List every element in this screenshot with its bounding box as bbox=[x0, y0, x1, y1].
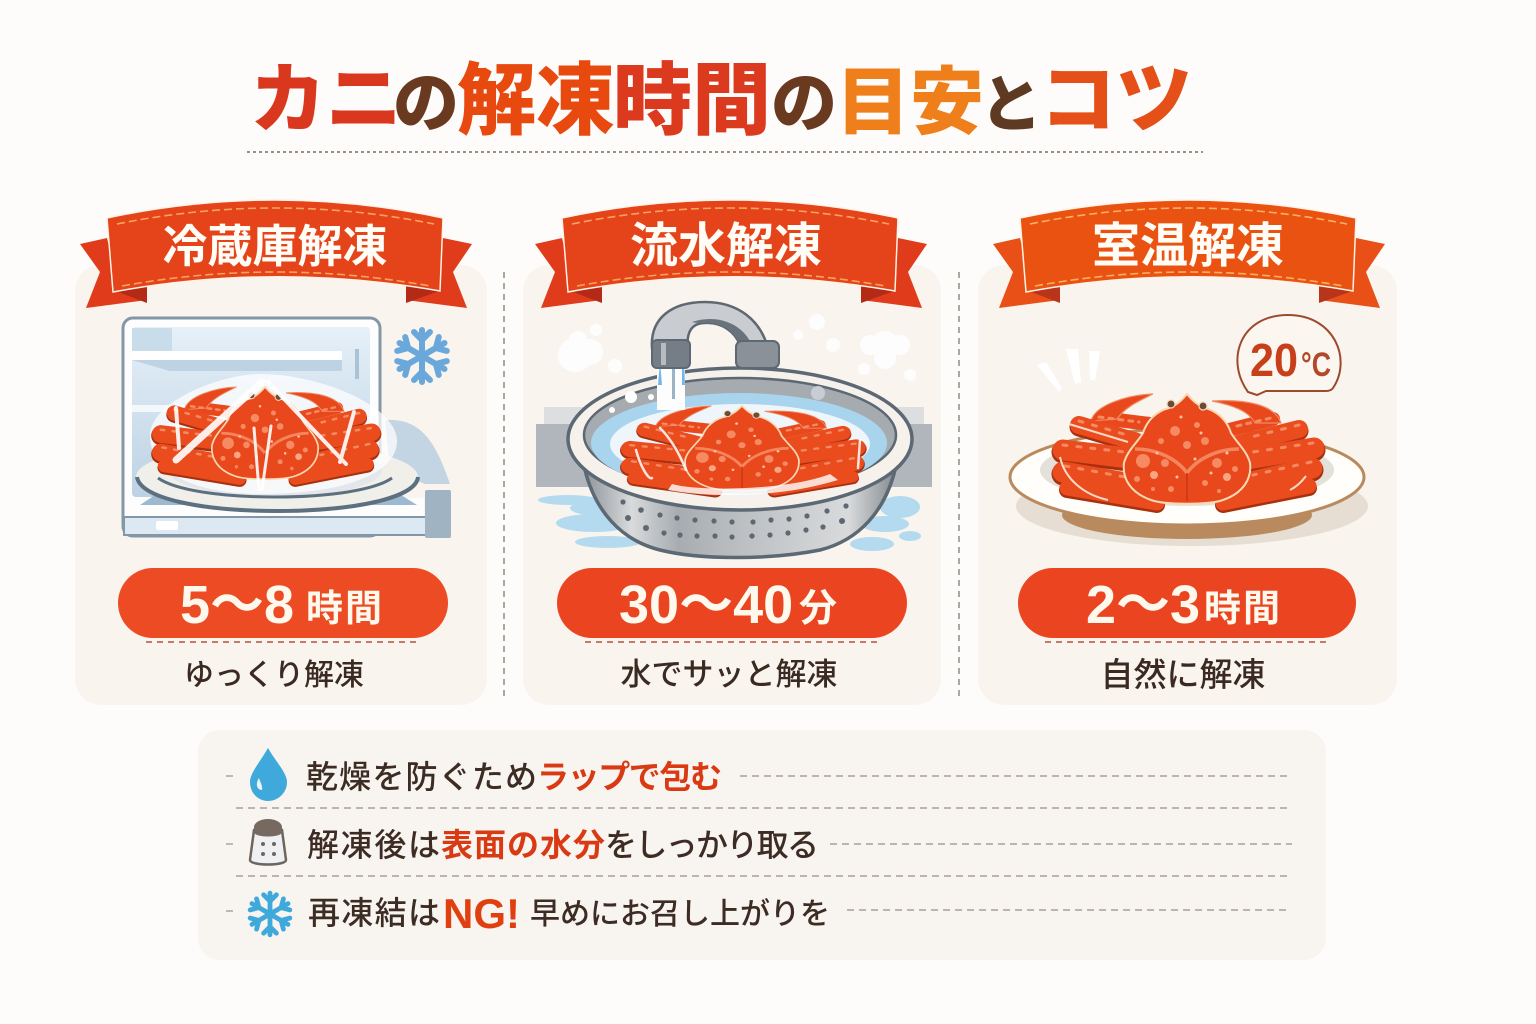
title: 時間 bbox=[613, 56, 771, 145]
tip text: 再凍結は bbox=[308, 895, 440, 931]
panel: refrigerator thawing bbox=[75, 265, 487, 705]
tip text bbox=[307, 827, 819, 863]
caption: 自然に解凍 bbox=[1100, 656, 1266, 693]
time pill: 2〜3 bbox=[1086, 575, 1200, 635]
icon: water drop bbox=[250, 748, 287, 801]
tip 2 bbox=[250, 819, 819, 864]
title: と bbox=[980, 71, 1042, 140]
callout: 20°C: 20 bbox=[1250, 334, 1298, 386]
tip text: 早めにお召し上がりを bbox=[530, 898, 830, 931]
divider bbox=[958, 272, 960, 697]
icon: snowflake bbox=[395, 330, 449, 382]
panel: tips bbox=[198, 730, 1326, 960]
tip text: をしっかり取る bbox=[605, 827, 819, 863]
callout: 20°C bbox=[1237, 315, 1341, 395]
banner: room temperature thawing bbox=[993, 200, 1385, 308]
tip text bbox=[308, 890, 830, 937]
time pill: 5〜8 bbox=[180, 575, 294, 635]
illustration: refrigerator with wrapped crab bbox=[123, 318, 451, 538]
illustration: crab in colander under faucet bbox=[536, 302, 932, 558]
panel background bbox=[523, 265, 941, 705]
illustration: crab on plate bbox=[1010, 349, 1368, 546]
time pill: 時間 bbox=[306, 588, 382, 629]
icon: salt shaker bbox=[250, 819, 286, 864]
tip text bbox=[306, 759, 722, 795]
panel background bbox=[75, 265, 487, 705]
time pill bbox=[118, 568, 448, 638]
tip text: 乾燥を防ぐため bbox=[306, 759, 537, 795]
tip text: 解凍後は bbox=[307, 827, 440, 863]
title: の bbox=[393, 66, 459, 140]
time pill bbox=[557, 568, 907, 638]
banner: refrigerator thawing: 冷蔵庫解凍 bbox=[162, 221, 388, 272]
time pill: 時間 bbox=[1204, 588, 1280, 629]
title: カニ bbox=[250, 58, 402, 143]
banner: room temperature thawing: 室温解凍 bbox=[1092, 220, 1284, 273]
time pill: 分 bbox=[799, 588, 837, 630]
panel: running water thawing bbox=[523, 265, 941, 705]
divider bbox=[503, 272, 505, 697]
title bbox=[250, 56, 1192, 145]
tip text: NG! bbox=[443, 890, 520, 937]
panel background bbox=[198, 730, 1326, 960]
tip text: ラップで包む bbox=[537, 759, 722, 795]
tip 1 bbox=[250, 748, 722, 801]
caption: ゆっくり解凍 bbox=[184, 659, 364, 692]
banner: running water thawing bbox=[535, 200, 927, 308]
caption: 水でサッと解凍 bbox=[620, 657, 838, 692]
time pill: 30〜40 bbox=[619, 575, 793, 635]
banner: refrigerator thawing bbox=[80, 200, 472, 308]
tip text: 表面の水分 bbox=[441, 827, 605, 863]
time pill bbox=[1018, 568, 1356, 638]
callout: 20°C: °C bbox=[1301, 346, 1331, 384]
icon: snowflake bbox=[249, 893, 291, 935]
title: の bbox=[771, 66, 837, 140]
panel background bbox=[978, 265, 1397, 705]
title: コツ bbox=[1040, 58, 1192, 143]
panel: room temperature thawing bbox=[978, 265, 1397, 705]
title: 解凍 bbox=[457, 56, 615, 145]
tip 3 bbox=[249, 890, 830, 937]
banner: running water thawing: 流水解凍 bbox=[630, 220, 822, 273]
title: 目安 bbox=[836, 61, 984, 144]
